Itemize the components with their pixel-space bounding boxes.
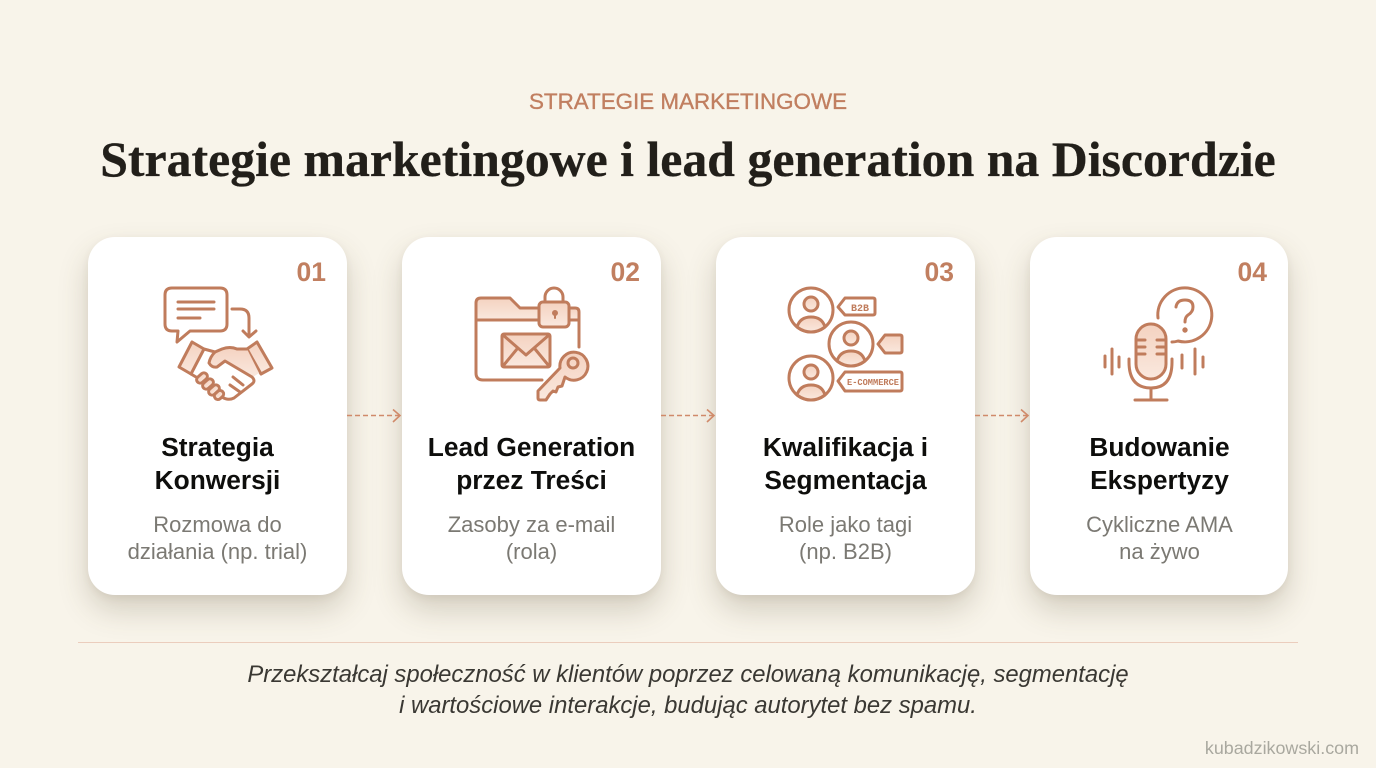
tag label B2B: B2B: [851, 304, 869, 315]
arrow: card 2 to card 3: [661, 409, 715, 422]
heading: Budowanie Ekspertyzy: [1089, 432, 1230, 495]
heading: Strategia Konwersji: Konwersji: [155, 465, 280, 495]
heading: Budowanie Ekspertyzy: Ekspertyzy: [1090, 465, 1229, 495]
text: card 4 description: [1086, 512, 1233, 564]
heading: Strategia Konwersji: [155, 432, 280, 495]
text: card 3 description: (np. B2B): [799, 539, 892, 564]
step number 03: 03: [925, 257, 954, 287]
text: card 3 description: [779, 512, 912, 564]
closing statement: [247, 661, 1129, 719]
panel: card 3: [716, 237, 975, 595]
heading: Lead Generation przez Treści: [428, 432, 635, 495]
step number 02: 02: [611, 257, 640, 287]
step number 04: 04: [1238, 257, 1267, 287]
text: card 3 description: Role jako tagi: [779, 512, 912, 537]
panel: card 4: [1030, 237, 1288, 595]
arrow: card 3 to card 4: [975, 409, 1029, 422]
text: card 1 description: Rozmowa do: [153, 512, 282, 537]
heading: Kwalifikacja i Segmentacja: Segmentacja: [764, 465, 927, 495]
text: card 2 description: [448, 512, 615, 564]
text: card 4 description: na żywo: [1119, 539, 1200, 564]
text: card 2 description: (rola): [506, 539, 557, 564]
step number 01: 01: [297, 257, 326, 287]
text: card 1 description: [128, 512, 307, 564]
tag label E-COMMERCE: E-COMMERCE: [847, 378, 900, 388]
heading: Kwalifikacja i Segmentacja: Kwalifikacja i: [763, 432, 928, 462]
panel: card 1: [88, 237, 347, 595]
title: Strategie marketingowe i lead generation na Discordzie: [100, 132, 1276, 187]
closing statement: i wartościowe interakcje, budując autorytet bez spamu.: [399, 692, 977, 719]
panel: card 2: [402, 237, 661, 595]
heading: Strategia Konwersji: Strategia: [161, 432, 274, 462]
heading: Lead Generation przez Treści: Lead Generation: [428, 432, 635, 462]
closing statement: Przekształcaj społeczność w klientów poprzez celowaną komunikację, segmentację: [247, 661, 1129, 688]
heading: Budowanie Ekspertyzy: Budowanie: [1089, 432, 1230, 462]
arrow: card 1 to card 2: [347, 409, 401, 422]
heading: Lead Generation przez Treści: przez Treści: [456, 465, 607, 495]
heading: Kwalifikacja i Segmentacja: [763, 432, 928, 495]
text: card 2 description: Zasoby za e-mail: [448, 512, 615, 537]
text: card 1 description: działania (np. trial): [128, 539, 307, 564]
watermark: kubadzikowski.com: [1205, 738, 1359, 758]
eyebrow label: STRATEGIE MARKETINGOWE: [529, 89, 847, 114]
text: card 4 description: Cykliczne AMA: [1086, 512, 1233, 537]
